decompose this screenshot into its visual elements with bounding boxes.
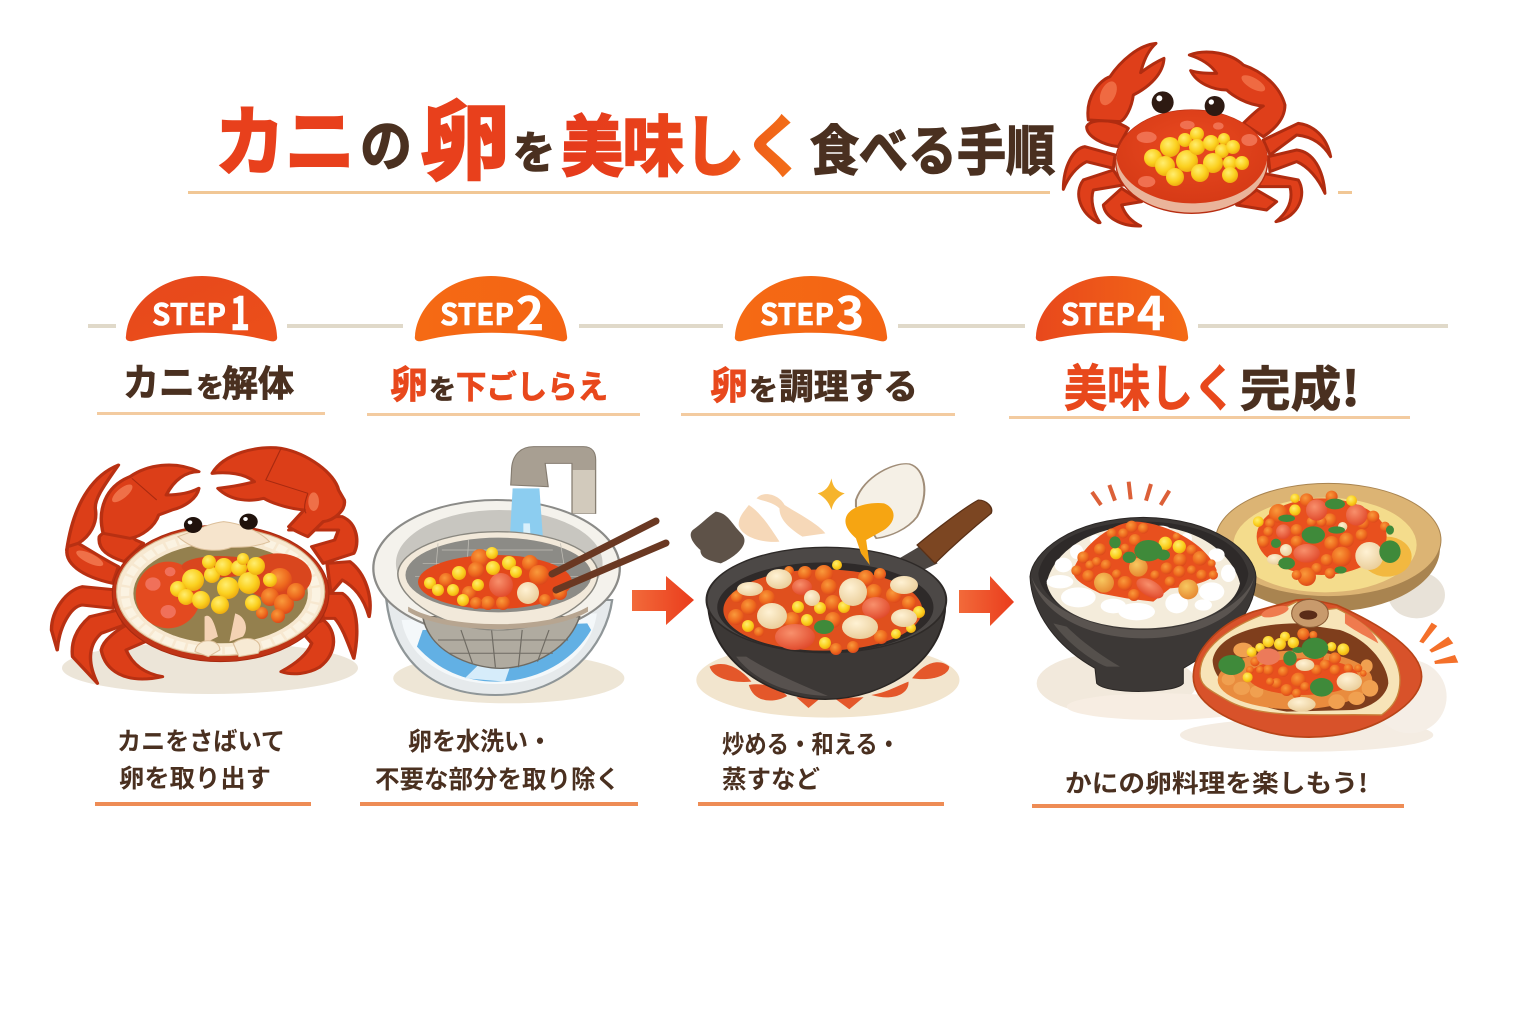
heading: step 4: 美味しく xyxy=(1064,349,1236,421)
sparkle rays xyxy=(1092,482,1458,664)
heading: step 4: 完成! xyxy=(1240,350,1360,420)
plate xyxy=(1216,483,1441,612)
header crab roe xyxy=(1144,127,1249,186)
crab 1 yellow roe xyxy=(170,553,277,614)
caption: step 2: 不要な部分を取り除く xyxy=(375,760,620,796)
soft shadows xyxy=(1037,572,1447,752)
crab 1 orange roe clump xyxy=(256,568,305,623)
badge: step 2 xyxy=(415,276,567,344)
colander roe xyxy=(439,549,567,610)
badge: step 2: STEP xyxy=(440,290,514,334)
caption: step 1 xyxy=(117,722,285,795)
heading: step 2: 卵 xyxy=(390,354,428,409)
title: roe: 卵 xyxy=(420,72,510,197)
heading: step 3: 調理する xyxy=(779,359,918,410)
caption: step 3 xyxy=(722,725,900,796)
title: particle wo: を xyxy=(513,117,555,181)
heading: step 3: を xyxy=(749,367,778,409)
title: crab: カニ xyxy=(215,81,355,191)
badge: step 3: STEP xyxy=(760,290,834,334)
caption: step 3: 蒸すなど xyxy=(722,760,820,796)
title xyxy=(215,72,1055,197)
badge: step 3 xyxy=(735,276,887,344)
heading: step 1 xyxy=(123,352,294,407)
badge: step 4: 4 xyxy=(1137,278,1165,344)
title: delicious: 美味しく xyxy=(562,94,805,190)
caption: step 2 xyxy=(375,722,620,796)
title: particle no: の xyxy=(360,102,412,183)
pan roe xyxy=(728,565,916,655)
heading: step 1: を xyxy=(196,366,224,406)
heading: step 1: 解体 xyxy=(222,355,294,407)
illustration: frying pan xyxy=(691,464,992,718)
chopsticks xyxy=(552,521,666,590)
heading: step 3: 卵 xyxy=(710,355,748,410)
badge: step 3: 3 xyxy=(836,278,864,344)
badge: step 4 xyxy=(1036,276,1188,344)
rice bowl xyxy=(1030,517,1256,691)
caption: step 1: 卵を取り出す xyxy=(119,759,271,795)
illustration: finished roe dishes xyxy=(1030,482,1458,752)
arrow: step 2 to 3 xyxy=(632,576,694,625)
step lines xyxy=(88,324,1448,328)
heading: step 3 xyxy=(710,355,918,410)
icon: header crab xyxy=(1063,43,1331,226)
caption: step 1: カニをさばいて xyxy=(117,722,285,758)
heading: step 2: を xyxy=(429,368,456,407)
badge: step 4: STEP xyxy=(1061,290,1135,334)
heading: step 1: カニ xyxy=(123,352,195,407)
caption: step 3: 炒める・和える・ xyxy=(722,725,900,761)
caption: step 4: かにの卵料理を楽しもう! xyxy=(1065,764,1368,800)
heading: step 2: 下ごしらえ xyxy=(456,362,608,408)
caption: step 2: 卵を水洗い・ xyxy=(408,722,552,758)
badge: step 1: STEP xyxy=(152,290,226,334)
illustration: colander under faucet xyxy=(373,447,666,703)
egg and ingredients xyxy=(691,464,924,565)
title: how to eat: 食べる手順 xyxy=(810,107,1055,186)
crab shell dish xyxy=(1193,599,1422,737)
badge: step 1: 1 xyxy=(230,278,250,344)
badge: step 2: 2 xyxy=(516,278,544,344)
arrow: step 3 to 4 xyxy=(959,576,1014,626)
badge: step 1 xyxy=(126,276,277,344)
heading: step 2 xyxy=(390,354,608,409)
illustration: cracked crab xyxy=(51,448,370,694)
heading: step 4 xyxy=(1064,349,1360,421)
